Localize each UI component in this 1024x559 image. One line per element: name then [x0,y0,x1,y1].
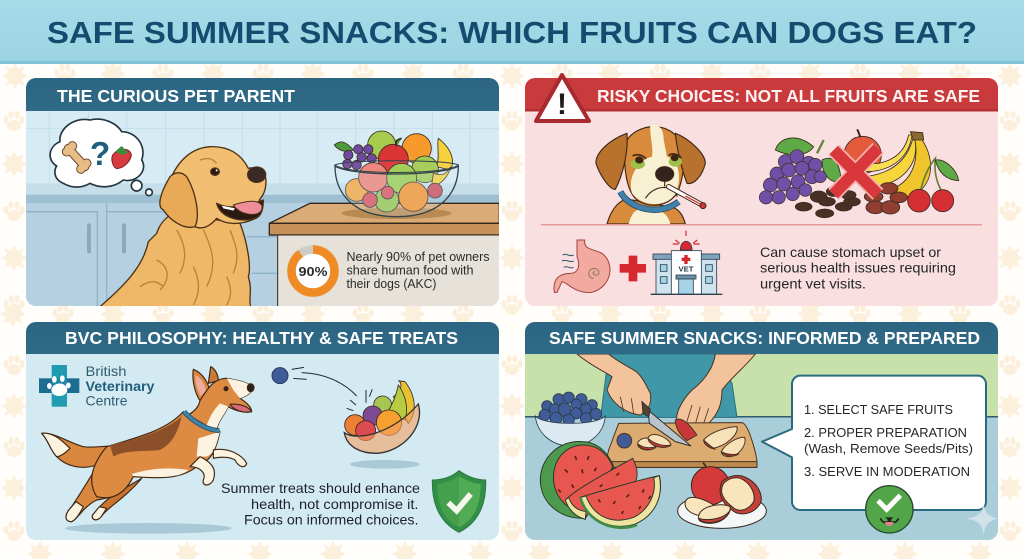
illustration: kitchen counter [269,203,504,308]
icon: upset stomach [554,240,610,293]
illustration: glass fruit bowl [334,131,458,217]
icon: check badge with dog face [866,486,913,533]
heading: bvc philosophy: BVC PHILOSOPHY: HEALTHY & SAFE TREATS [65,328,458,348]
illustration: jumping dog [42,367,254,522]
text: three preparation steps: (Wash, Remove Seeds/Pits) [804,441,973,456]
icon: thought bubble with bone, question mark and strawberry: ? [90,136,110,173]
title banner [0,0,1024,64]
text: summer treats message: Summer treats should enhance [221,480,420,496]
illustration: watermelon slices [540,442,660,528]
panel header [26,78,499,111]
decorative sparkle [966,504,998,535]
icon: tilted fruit bowl [344,381,420,453]
heading: risky choices: RISKY CHOICES: NOT ALL FRUITS ARE SAFE [597,86,980,106]
text: risk description: Can cause stomach upset or [760,244,941,260]
text: three preparation steps: 3. SERVE IN MODERATION [804,464,970,479]
icon: british veterinary centre logo [39,365,79,407]
title banner: SAFE SUMMER SNACKS: WHICH FRUITS CAN DOGS EAT? [47,15,977,50]
text: british veterinary centre: Veterinary [86,378,155,394]
text: three preparation steps: 1. SELECT SAFE FRUITS [804,402,953,417]
chart: 90 percent donut [292,250,334,292]
kitchen background [26,112,499,307]
text: summer treats message: Focus on informed choices. [244,512,418,528]
text: summer treats message: health, not compromise it. [251,496,418,512]
text: pet owner statistic: Nearly 90% of pet owners [346,250,490,264]
icon: vet hospital [651,231,722,294]
heading: the curious pet parent: THE CURIOUS PET PARENT [57,86,295,106]
text: pet owner statistic: share human food with [346,264,474,278]
shadow under dog [65,523,232,534]
panel: the curious pet parent [26,78,504,308]
icon: warning triangle: ! [557,88,567,121]
illustration: cutting board with apple slices [607,419,757,467]
text: risk description: serious health issues requiring [760,260,956,276]
text: british veterinary centre: British [86,363,126,379]
icon: safety shield with check [432,471,486,532]
illustration: plate of sliced apple [678,463,766,528]
shadow under bowl [350,460,420,469]
illustration: bowl of blueberries [535,392,605,446]
illustration: unsafe fruits with red cross [759,129,959,218]
panel header [525,322,998,354]
icon: thought bubble with bone, question mark and strawberry [50,119,152,196]
text: british veterinary centre: Centre [86,392,128,408]
icon: warning triangle [536,75,589,121]
chart: 90 percent donut: 90% [298,264,328,279]
heading: informed and prepared: SAFE SUMMER SNACKS: INFORMED & PREPARED [549,328,980,348]
text: three preparation steps: 2. PROPER PREPARATION [804,425,967,440]
panel: bvc philosophy [26,322,499,540]
text: risk description: urgent vet visits. [760,276,866,292]
text: pet owner statistic: their dogs (AKC) [346,277,436,291]
illustration: golden retriever [100,147,266,307]
illustration: person slicing apple [577,354,755,430]
icon: vet hospital: VET [679,265,694,274]
panel header [26,322,499,354]
panel: risky choices [525,75,998,306]
illustration: sick dog with thermometer [596,125,706,224]
panel: informed and prepared [525,322,998,540]
callout: three steps speech bubble [762,376,986,510]
icon: red plus [620,256,646,281]
icon: kitchen knife [642,402,691,446]
icon: blueberry with motion arc [272,367,372,411]
